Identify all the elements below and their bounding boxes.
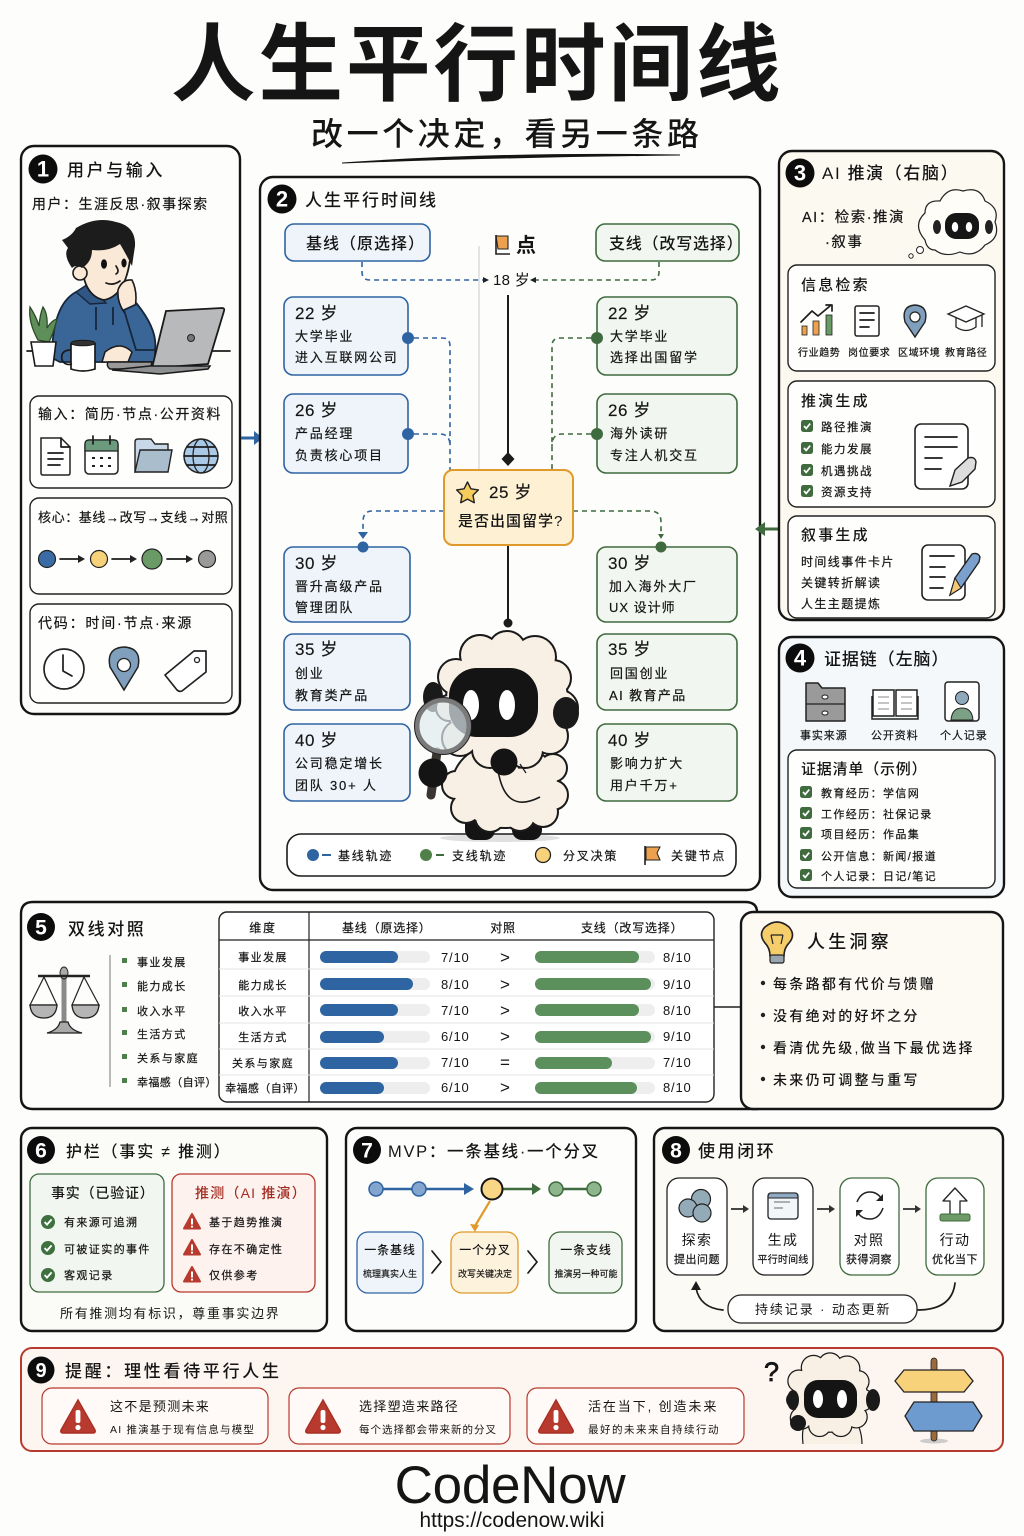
- sub-panel: narrative generation: 人生主题提炼: [801, 596, 881, 611]
- row: happiness: [225, 1078, 692, 1097]
- reminder card 1: AI 推演基于现有信息与模型: [110, 1423, 255, 1436]
- panel 1: user and input: [21, 146, 240, 714]
- card: baseline age 40: 团队 30+ 人: [295, 778, 378, 793]
- evidence source labels: 公开资料: [871, 728, 919, 742]
- icon: job page: [855, 306, 879, 336]
- row: relationships: [232, 1053, 692, 1072]
- sub-panel: code: [30, 604, 232, 703]
- heading: MVP: MVP：一条基线·一个分叉: [388, 1142, 600, 1161]
- retrieval labels: 区域环境: [898, 346, 940, 359]
- sub-panel: narrative generation: 关键转折解读: [801, 575, 881, 590]
- card: branch age 40: [597, 724, 737, 801]
- icon: globe: [184, 439, 218, 473]
- card: branch age 26: [591, 394, 737, 473]
- panel 7: MVP: [346, 1128, 636, 1331]
- table header: 支线（改写选择）: [581, 921, 683, 935]
- age 18 label: 18 岁: [493, 272, 530, 289]
- reminder card 3: [527, 1388, 744, 1444]
- row: income: 8/10: [663, 1003, 692, 1018]
- badge 8: [662, 1136, 690, 1164]
- heading: life timeline: 人生平行时间线: [305, 191, 438, 210]
- step: act: [926, 1178, 984, 1275]
- sub-panel: evidence list: [788, 750, 995, 888]
- step: compare: 对照: [854, 1232, 884, 1248]
- panel 2: life timeline: [260, 177, 760, 890]
- panel 6: guardrails: [21, 1128, 327, 1331]
- checklist: 路径推演: [821, 420, 873, 434]
- arrow: input to timeline: [241, 431, 263, 445]
- card: branch age 26: 海外读研: [610, 426, 669, 441]
- card: branch age 35: [597, 634, 737, 710]
- row: lifestyle: 生活方式: [238, 1030, 288, 1044]
- row: relationships: 7/10: [663, 1055, 692, 1070]
- panel 9: reminder: [21, 1348, 1003, 1451]
- legend: decision: 分叉决策: [563, 849, 618, 863]
- reminder card 1: [42, 1388, 268, 1444]
- pill: baseline: 基线（原选择）: [306, 235, 425, 253]
- icon: document: [41, 438, 70, 475]
- row: happiness: >: [500, 1078, 510, 1097]
- retrieval labels: [798, 346, 987, 359]
- retrieval labels: 教育路径: [945, 346, 987, 359]
- card: baseline age 35: 创业: [295, 666, 325, 681]
- heading: dual comparison: 双线对照: [68, 920, 146, 939]
- legend: decision: [536, 848, 618, 863]
- sub-panel: evidence list: 个人记录：日记/笔记: [821, 869, 937, 883]
- table header: 对照: [490, 921, 516, 935]
- heading: evidence chain: 证据链（左脑）: [824, 650, 949, 669]
- card: baseline age 26: 负责核心项目: [295, 448, 384, 463]
- icon: person card: [945, 682, 979, 721]
- evidence source labels: 事实来源: [800, 728, 848, 742]
- card: decision at 25: 是否出国留学?: [458, 512, 563, 530]
- heading: guardrails: 护栏（事实 ≠ 推测）: [66, 1142, 231, 1161]
- panel 5: dual comparison: [21, 902, 757, 1109]
- badge 4: [786, 644, 814, 672]
- sub-panel: information retrieval: [788, 265, 995, 371]
- insights list: 没有绝对的好坏之分: [773, 1008, 920, 1024]
- step: generate: 平行时间线: [758, 1253, 808, 1266]
- facts box: 事实（已验证）: [51, 1185, 155, 1201]
- icon: open book: [872, 690, 918, 719]
- comparison table: [219, 912, 714, 1102]
- step: generate: [753, 1178, 813, 1275]
- AI description: [802, 209, 905, 251]
- AI description: AI：检索·推演: [802, 209, 905, 226]
- card: baseline age 22: 22 岁: [295, 304, 338, 323]
- inference box: 推测（AI 推演）: [195, 1185, 307, 1201]
- badge 2: 2: [276, 186, 288, 212]
- card: decision at 25: 25 岁: [489, 483, 532, 502]
- panel 4: evidence chain: [779, 637, 1004, 897]
- badge 9: 9: [35, 1360, 47, 1382]
- chevron: [432, 1251, 441, 1273]
- arrow: [903, 1205, 921, 1213]
- icon: file cabinet: [806, 683, 845, 721]
- AI description: ·叙事: [825, 234, 863, 251]
- reminder card 3: 活在当下, 创造未来: [588, 1399, 718, 1414]
- card: baseline age 35: [284, 634, 410, 710]
- pill: baseline: [285, 224, 430, 261]
- facts box: [30, 1174, 164, 1292]
- node header: flag and point: [496, 234, 536, 257]
- card: branch age 40: 40 岁: [608, 731, 651, 750]
- card: branch age 26: 专注人机交互: [610, 448, 699, 463]
- step: one baseline: 梳理真实人生: [363, 1268, 417, 1279]
- icon: thought cloud robot: [909, 190, 997, 258]
- step: compare: 获得洞察: [846, 1252, 892, 1266]
- row: ability: >: [500, 975, 510, 994]
- card: branch age 30: 加入海外大厂: [609, 579, 698, 594]
- row: ability: 8/10: [441, 977, 470, 992]
- card: baseline age 40: [284, 724, 410, 801]
- reminder card 3: 最好的未来来自持续行动: [588, 1423, 720, 1436]
- checklist: [801, 420, 873, 499]
- checklist: 能力发展: [821, 442, 873, 456]
- sub-panel: input: 输入：简历·节点·公开资料: [38, 406, 222, 422]
- arrow: [731, 1205, 749, 1213]
- sub-panel: information retrieval: 信息检索: [801, 276, 870, 294]
- step: generate: 生成: [768, 1232, 798, 1248]
- inference box: 基于趋势推演: [209, 1215, 283, 1229]
- illustration: user at laptop: [27, 220, 230, 374]
- legend: key node: 关键节点: [671, 849, 726, 863]
- card: branch age 30: [597, 542, 737, 622]
- step: explore: 提出问题: [674, 1252, 720, 1266]
- dimension list: 能力成长: [137, 979, 187, 993]
- card: branch age 26: 26 岁: [608, 401, 651, 420]
- badge 4: 4: [794, 646, 807, 670]
- row: income: [238, 1001, 692, 1020]
- badge 9: [28, 1356, 54, 1384]
- sub-panel: narrative generation: 时间线事件卡片: [801, 555, 895, 569]
- icon: folder: [135, 439, 172, 472]
- retrieval labels: 行业趋势: [798, 346, 840, 359]
- card: baseline age 22: 进入互联网公司: [295, 350, 399, 365]
- step: explore: [667, 1178, 727, 1275]
- chevron: [528, 1251, 537, 1273]
- reminder card 2: 每个选择都会带来新的分叉: [359, 1423, 497, 1436]
- legend: [287, 834, 736, 876]
- row: lifestyle: 6/10: [441, 1029, 470, 1044]
- step: act: 行动: [940, 1232, 970, 1248]
- icon: trend bars: [801, 305, 832, 335]
- card: branch age 22: [591, 297, 737, 375]
- pill: branch: [596, 224, 743, 261]
- row: relationships: 关系与家庭: [232, 1056, 294, 1070]
- badge 7: 7: [361, 1140, 373, 1162]
- pill: branch: 支线（改写选择）: [609, 235, 743, 253]
- legend: branch: [420, 849, 507, 863]
- sub-panel: narrative generation: 叙事生成: [801, 527, 870, 544]
- row: career: >: [500, 948, 510, 967]
- facts box: 有来源可追溯: [64, 1215, 138, 1229]
- sub-panel: core flow: [30, 498, 232, 594]
- badge 3: 3: [794, 160, 806, 186]
- sub-panel: evidence list: 教育经历：学信网: [821, 786, 920, 800]
- flow dots: [38, 549, 216, 569]
- panel 3: AI simulation: [779, 151, 1004, 620]
- icon: clock: [44, 649, 84, 689]
- card: baseline age 22: 大学毕业: [295, 329, 354, 344]
- card: branch age 35: AI 教育产品: [609, 688, 687, 703]
- sub-panel: evidence list: 项目经历：作品集: [821, 827, 920, 841]
- insights list: 看清优先级,做当下最优选择: [773, 1040, 975, 1056]
- subtitle underline: [342, 154, 680, 163]
- card: baseline age 30: [284, 542, 410, 622]
- node header: flag and point: 点: [516, 234, 536, 257]
- sub-panel: evidence list: 工作经历：社保记录: [821, 807, 933, 821]
- step: one baseline: 一条基线: [364, 1242, 416, 1257]
- step: one branch: 推演另一种可能: [554, 1268, 618, 1279]
- badge 6: 6: [35, 1140, 47, 1162]
- row: ability: 9/10: [663, 977, 692, 992]
- icon: clipboard: [768, 1193, 798, 1219]
- dimension list: 事业发展: [137, 955, 187, 969]
- badge 5: [27, 913, 55, 941]
- legend: baseline: [307, 849, 393, 863]
- legend: key node: [645, 846, 726, 865]
- icon: notes and pencil: [922, 545, 980, 600]
- insights list: 每条路都有代价与馈赠: [773, 976, 936, 992]
- facts box: 可被证实的事件: [64, 1242, 151, 1256]
- row: career: [238, 948, 692, 967]
- row: relationships: 7/10: [441, 1055, 470, 1070]
- card: baseline age 35: 教育类产品: [295, 688, 369, 703]
- row: income: 收入水平: [238, 1004, 288, 1018]
- dimension list: 关系与家庭: [137, 1051, 199, 1065]
- card: baseline age 26: 产品经理: [295, 426, 354, 441]
- step: one baseline: [357, 1232, 423, 1293]
- row: income: 7/10: [441, 1003, 470, 1018]
- central timeline: [502, 295, 514, 628]
- card: branch age 22: 选择出国留学: [610, 350, 699, 365]
- sub-panel: simulation generation: 推演生成: [801, 393, 870, 410]
- step: explore: 探索: [682, 1232, 712, 1248]
- icon: signpost: [895, 1358, 982, 1444]
- card: baseline age 22: [284, 297, 414, 375]
- step: one fork: 一个分叉: [459, 1243, 511, 1257]
- icon: region pin: [904, 305, 926, 337]
- facts box: 客观记录: [64, 1268, 114, 1282]
- dashed connectors to age 18: [362, 262, 659, 283]
- sub-panel: input: [30, 396, 232, 488]
- icon: light bulb: [762, 922, 792, 963]
- checklist: 机遇挑战: [821, 464, 873, 478]
- connector to insights: [714, 1006, 741, 1008]
- badge 8: 8: [670, 1140, 682, 1162]
- MVP node flow: [369, 1178, 601, 1232]
- icon: balance scale: [30, 967, 99, 1033]
- guardrail footer: 所有推测均有标识，尊重事实边界: [60, 1306, 281, 1321]
- checklist: 资源支持: [821, 485, 873, 499]
- loop arrows: [691, 1281, 955, 1310]
- sub-panel: simulation generation: [788, 381, 995, 507]
- card: baseline age 26: 26 岁: [295, 401, 338, 420]
- evidence source labels: 个人记录: [940, 729, 988, 742]
- inference box: 存在不确定性: [209, 1242, 283, 1256]
- dimension list: 收入水平: [137, 1004, 187, 1018]
- arrow: AI to timeline: [755, 522, 779, 536]
- table header: 维度: [249, 920, 277, 935]
- card: baseline age 30: 30 岁: [295, 554, 338, 573]
- heading: usage loop: 使用闭环: [698, 1142, 776, 1161]
- row: happiness: 6/10: [441, 1080, 470, 1095]
- table header: [249, 920, 683, 935]
- card: baseline age 35: 35 岁: [295, 640, 338, 659]
- dimension list: 生活方式: [137, 1027, 187, 1041]
- sub-panel: narrative generation: [788, 516, 995, 618]
- card: decision at 25: [444, 470, 573, 545]
- evidence source labels: [800, 728, 988, 742]
- reminder card 2: 选择塑造来路径: [359, 1399, 459, 1414]
- panel 8: usage loop: [654, 1128, 1003, 1331]
- badge 5: 5: [35, 916, 47, 940]
- pill: keep recording: 持续记录 · 动态更新: [755, 1302, 891, 1317]
- center divider: [478, 246, 480, 470]
- row: career: 8/10: [663, 950, 692, 965]
- card: baseline age 40: 40 岁: [295, 731, 338, 750]
- row: lifestyle: [238, 1027, 692, 1046]
- heading: AI simulation: AI 推演（右脑）: [822, 164, 959, 183]
- card: baseline age 40: 公司稳定增长: [295, 756, 384, 771]
- card: branch age 35: 35 岁: [608, 640, 651, 659]
- heading: life insights: 人生洞察: [807, 932, 892, 952]
- card: branch age 22: 22 岁: [608, 304, 651, 323]
- card: branch age 35: 回国创业: [610, 666, 669, 681]
- badge 7: [353, 1136, 381, 1164]
- sub-panel: evidence list: 公开信息：新闻/报道: [821, 849, 937, 863]
- badge 2: [268, 184, 296, 214]
- card: branch age 40: 用户千万+: [610, 778, 679, 793]
- card: baseline age 30: 管理团队: [295, 600, 354, 615]
- row: ability: 能力成长: [238, 978, 288, 992]
- table header: 基线（原选择）: [342, 921, 432, 935]
- row: career: 事业发展: [238, 950, 288, 964]
- badge 6: [27, 1136, 55, 1164]
- step: one fork: 改写关键决定: [458, 1268, 512, 1279]
- mascot: thinking sheep: [787, 1354, 880, 1444]
- retrieval labels: 岗位要求: [848, 346, 890, 359]
- icon: explore bubbles: [679, 1190, 711, 1222]
- branch connectors: [552, 338, 664, 539]
- dimension list: 幸福感（自评）: [137, 1075, 217, 1089]
- logo: CodeNow: CodeNow: [395, 1456, 626, 1515]
- row: happiness: 8/10: [663, 1080, 692, 1095]
- icon: refresh: [856, 1192, 883, 1219]
- card: branch age 30: 30 岁: [608, 554, 651, 573]
- card: baseline age 26: [284, 394, 414, 473]
- step: one branch: 一条支线: [560, 1242, 612, 1257]
- card: baseline age 30: 晋升高级产品: [295, 579, 384, 594]
- heading: user and input: 用户与输入: [67, 161, 165, 180]
- icon: calendar: [85, 436, 118, 474]
- row: lifestyle: 9/10: [663, 1029, 692, 1044]
- subtitle: 改一个决定，看另一条路: [311, 116, 703, 152]
- reminder card 2: [289, 1388, 510, 1444]
- badge 3: [786, 158, 814, 188]
- arrow: [817, 1205, 835, 1213]
- inference box: [172, 1174, 315, 1292]
- user line: 用户：生涯反思·叙事探索: [32, 196, 209, 212]
- step: one branch: [549, 1232, 622, 1293]
- pill: keep recording: [728, 1295, 917, 1323]
- step: act: 优化当下: [932, 1252, 978, 1266]
- icon: document and pen: [915, 424, 976, 489]
- row: lifestyle: >: [500, 1027, 510, 1046]
- panel: life insights: [741, 912, 1003, 1109]
- heading: reminder: 提醒：理性看待平行人生: [65, 1362, 282, 1381]
- step: one fork: [451, 1232, 518, 1293]
- icon: tag: [165, 651, 206, 691]
- reminder card 1: 这不是预测未来: [110, 1399, 210, 1414]
- baseline connectors: [358, 338, 450, 539]
- inference box: 仅供参考: [209, 1268, 259, 1282]
- badge 1: 1: [37, 156, 49, 182]
- icon: graduation cap: [948, 306, 984, 330]
- legend: branch: 支线轨迹: [452, 849, 507, 863]
- sub-panel: code: 代码：时间·节点·来源: [38, 615, 193, 631]
- legend: baseline: 基线轨迹: [338, 849, 393, 863]
- row: ability: [238, 975, 692, 994]
- icon: location pin: [109, 647, 139, 690]
- row: relationships: =: [500, 1053, 510, 1072]
- icon: upload arrow: [940, 1188, 970, 1221]
- badge 1: [28, 154, 58, 184]
- dimension list: [110, 955, 217, 1089]
- insights list: 未来仍可调整与重写: [773, 1072, 920, 1088]
- insights list: [761, 976, 975, 1088]
- row: happiness: 幸福感（自评）: [225, 1081, 305, 1095]
- card: branch age 40: 影响力扩大: [610, 756, 684, 771]
- row: income: >: [500, 1001, 510, 1020]
- row: career: 7/10: [441, 950, 470, 965]
- sub-panel: evidence list: 证据清单（示例）: [801, 761, 927, 778]
- card: branch age 22: 大学毕业: [610, 329, 669, 344]
- question mark: ?: [764, 1357, 779, 1387]
- step: compare: [840, 1178, 899, 1275]
- url: https://codenow.wiki: [420, 1509, 604, 1532]
- card: branch age 30: UX 设计师: [609, 600, 676, 615]
- sub-panel: core flow: 核心：基线→改写→支线→对照: [38, 510, 228, 525]
- mascot: sheep with magnifier: [414, 632, 579, 842]
- title: 人生平行时间线: [171, 18, 784, 112]
